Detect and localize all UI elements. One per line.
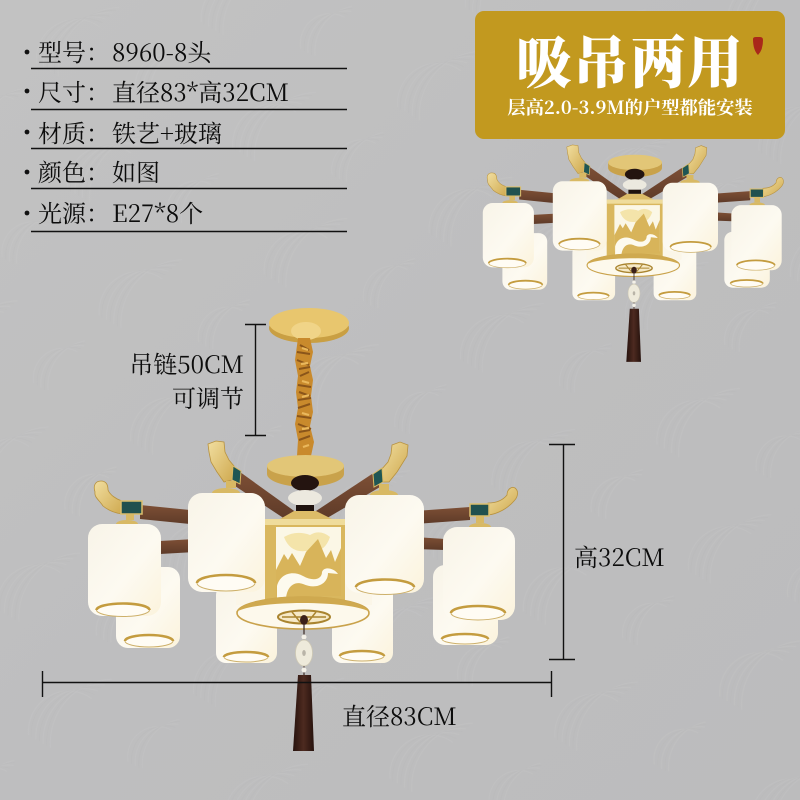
chandelier body <box>88 441 518 751</box>
ceiling rose <box>269 308 349 343</box>
dimension: chain length <box>129 324 266 436</box>
dimension: chain length: 吊链50CM <box>129 345 244 380</box>
spec: model: 8960-8头 <box>112 33 212 68</box>
dimension: chain length: 可调节 <box>172 379 244 414</box>
spec: size: 尺寸： <box>38 73 110 108</box>
spec: material: 材质： <box>38 114 110 149</box>
spec: light source: 光源： <box>38 194 110 229</box>
dimension: height: 高32CM <box>574 538 665 573</box>
badge: dual mounting <box>475 11 785 139</box>
spec list <box>25 33 347 232</box>
large pendant chandelier <box>88 308 518 751</box>
dimension: diameter: 直径83CM <box>342 697 457 732</box>
chain cover <box>295 338 314 456</box>
badge title: 吸吊两用 <box>516 20 744 100</box>
spec: model <box>25 33 347 68</box>
spec: colour <box>25 153 347 188</box>
dimension: diameter <box>42 671 552 732</box>
small flush-mount chandelier <box>483 145 783 362</box>
spec: colour: 如图 <box>112 153 160 188</box>
spec: model: 型号： <box>38 33 110 68</box>
spec: material: 铁艺+玻璃 <box>112 114 222 149</box>
spec: light source <box>25 194 347 232</box>
spec: colour: 颜色： <box>38 153 110 188</box>
dimension: height <box>549 444 665 660</box>
spec: light source: E27*8个 <box>112 194 203 229</box>
spec: size: 直径83*高32CM <box>112 73 289 108</box>
badge subtitle: 层高2.0-3.9M的户型都能安装 <box>507 94 753 120</box>
spec: material <box>25 114 347 149</box>
spec: size <box>25 73 347 110</box>
icon: red seal <box>753 37 763 55</box>
